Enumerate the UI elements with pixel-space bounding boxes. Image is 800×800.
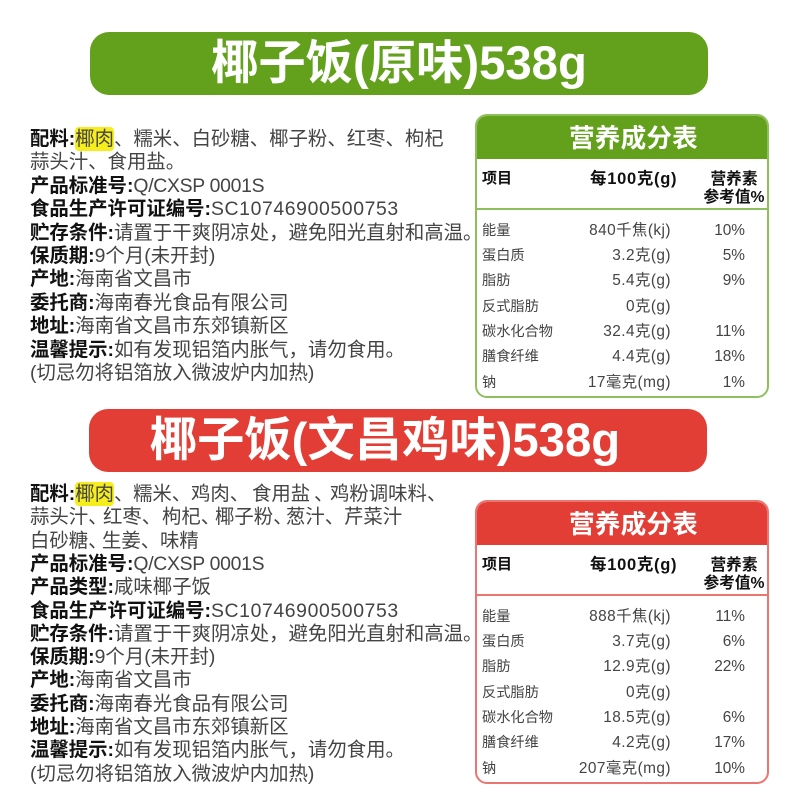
panel: original flavor nutrition table (475, 114, 769, 398)
row: sodium: 207毫克(mg) (579, 760, 671, 776)
text block: chicken flavor product information: 保质期:9个月(未开封) (30, 646, 215, 668)
text block: chicken flavor product information: 生姜、 (102, 530, 160, 552)
row: fat: 脂肪 (482, 659, 510, 675)
text block: chicken flavor product information: 食品生产许可证编号:SC10746900500753 (30, 600, 399, 622)
row: sodium: 钠 (482, 374, 496, 390)
text block: chicken flavor product information: 产品类型:咸味椰子饭 (30, 576, 211, 598)
row: energy: 能量 (482, 223, 510, 239)
row: protein: 蛋白质 (482, 634, 525, 650)
row: protein: 5% (723, 247, 745, 264)
row: protein (482, 246, 745, 264)
text block: chicken flavor product information: 红枣、 (103, 506, 161, 528)
row: trans fat: 0克(g) (626, 684, 671, 700)
row: trans fat: 反式脂肪 (482, 684, 539, 700)
table header: nutrient reference value: 参考值% (703, 189, 764, 206)
text block: original flavor product information: 地址:海南省文昌市东郊镇新区 (30, 315, 289, 337)
row: dietary fiber (482, 348, 745, 365)
row: carbohydrate: 6% (723, 708, 745, 726)
row: carbohydrate: 碳水化合物 (482, 710, 553, 726)
text block: chicken flavor product information: 味精 (160, 530, 199, 552)
row: dietary fiber: 18% (714, 348, 745, 365)
text block: original flavor product information (30, 127, 482, 384)
text block: chicken flavor product information: 地址:海南省文昌市东郊镇新区 (30, 716, 289, 738)
row: energy: 840千焦(kj) (589, 222, 671, 239)
row: energy (482, 222, 745, 239)
text block: chicken flavor product information: 椰子粉、 (215, 506, 293, 528)
title: original flavor: 椰子饭(原味)538g (211, 37, 587, 90)
row: carbohydrate: 32.4克(g) (603, 322, 671, 340)
panel heading: 营养成分表 (569, 125, 698, 153)
table header: item: 项目 (482, 170, 512, 187)
row: sodium: 10% (714, 760, 745, 776)
text block: chicken flavor product information: 鸡粉调味料、 (330, 483, 446, 505)
row: energy: 能量 (482, 609, 510, 625)
text block: chicken flavor product information: 枸杞、 (162, 506, 220, 528)
text block: chicken flavor product information: 配料:椰肉、 (30, 483, 133, 505)
row: carbohydrate: 11% (715, 322, 745, 340)
row: energy: 888千焦(kj) (589, 608, 671, 625)
title: original flavor (90, 32, 708, 95)
row: fat: 5.4克(g) (612, 272, 671, 289)
table header: per 100g: 每100克(g) (590, 556, 677, 574)
row: sodium (482, 374, 745, 390)
text block: original flavor product information: 产品标准号:Q/CXSP 0001S (30, 175, 264, 197)
row: trans fat (482, 684, 671, 700)
row: fat: 12.9克(g) (603, 658, 671, 675)
row: carbohydrate (482, 708, 745, 726)
row: trans fat (482, 298, 671, 314)
text block: original flavor product information: 产地:海南省文昌市 (30, 268, 192, 290)
row: dietary fiber: 4.4克(g) (612, 348, 671, 365)
panel: chicken flavor nutrition table (475, 500, 769, 784)
row: fat: 22% (714, 658, 745, 675)
text block: chicken flavor product information: 产品标准号:Q/CXSP 0001S (30, 553, 264, 575)
panel heading (475, 500, 769, 545)
row: dietary fiber: 17% (714, 734, 745, 751)
row: dietary fiber: 膳食纤维 (482, 349, 539, 365)
text block: original flavor product information: 保质期:9个月(未开封) (30, 245, 215, 267)
row: trans fat: 0克(g) (626, 298, 671, 314)
text block: original flavor product information: (切忌勿将铝箔放入微波炉内加热) (30, 362, 314, 384)
table header: nutrient reference value: 参考值% (703, 575, 764, 592)
row: trans fat: 反式脂肪 (482, 298, 539, 314)
text block: chicken flavor product information: 产地:海南省文昌市 (30, 669, 192, 691)
row: sodium: 1% (723, 374, 745, 390)
text block: original flavor product information: 蒜头汁、食用盐。 (30, 151, 185, 173)
text block: chicken flavor product information: 贮存条件:请置于干爽阴凉处，避免阳光直射和高温。 (30, 623, 482, 645)
text block: chicken flavor product information: 食用盐 (252, 483, 310, 505)
row: carbohydrate: 碳水化合物 (482, 324, 553, 340)
row: protein: 3.2克(g) (612, 247, 671, 264)
text block: original flavor product information: 配料:椰肉、糯米、白砂糖、椰子粉、红枣、枸杞 (30, 128, 444, 150)
text block: chicken flavor product information: 蒜头汁、 (30, 506, 108, 528)
text block: original flavor product information: 温馨提示:如有发现铝箔内胀气，请勿食用。 (30, 339, 405, 361)
row: protein: 蛋白质 (482, 248, 525, 264)
row: dietary fiber: 膳食纤维 (482, 735, 539, 751)
row: dietary fiber (482, 734, 745, 751)
text block: chicken flavor product information: 委托商:海南春光食品有限公司 (30, 693, 289, 715)
text block: chicken flavor product information: 葱汁、 (286, 506, 344, 528)
table header: nutrient reference value: 营养素 (710, 557, 758, 574)
row: fat (482, 658, 745, 675)
table header: per 100g: 每100克(g) (590, 170, 677, 188)
row: fat: 脂肪 (482, 273, 510, 289)
row: fat (482, 272, 745, 289)
text block: original flavor product information: 贮存条件:请置于干爽阴凉处，避免阳光直射和高温。 (30, 222, 482, 244)
panel heading: 营养成分表 (569, 511, 698, 539)
row: carbohydrate (482, 322, 745, 340)
row: energy: 10% (714, 222, 745, 239)
table header: item: 项目 (482, 556, 512, 573)
row: protein: 6% (723, 633, 745, 650)
text block: chicken flavor product information: (切忌勿将铝箔放入微波炉内加热) (30, 763, 314, 785)
text block: chicken flavor product information: 温馨提示:如有发现铝箔内胀气，请勿食用。 (30, 739, 405, 761)
row: protein: 3.7克(g) (612, 633, 671, 650)
text block: chicken flavor product information (30, 482, 482, 785)
text block: chicken flavor product information: 糯米、 (133, 483, 191, 505)
title: Wenchang chicken flavor (89, 409, 707, 472)
table header: nutrient reference value: 营养素 (710, 171, 758, 188)
text block: chicken flavor product information: 、 (314, 483, 333, 505)
row: sodium (482, 760, 745, 776)
text block: original flavor product information: 食品生产许可证编号:SC10746900500753 (30, 198, 399, 220)
text block: chicken flavor product information: 芹菜汁 (344, 506, 402, 528)
row: dietary fiber: 4.2克(g) (612, 734, 671, 751)
row: sodium: 17毫克(mg) (588, 374, 671, 390)
row: energy: 11% (715, 608, 745, 625)
row: protein (482, 632, 745, 650)
table header: nutrient reference value (703, 556, 764, 592)
row: fat: 9% (723, 272, 745, 289)
row: sodium: 钠 (482, 760, 496, 776)
panel heading (475, 114, 769, 159)
title: Wenchang chicken flavor: 椰子饭(文昌鸡味)538g (150, 414, 620, 467)
table header: nutrient reference value (703, 170, 764, 206)
text block: original flavor product information: 委托商:海南春光食品有限公司 (30, 292, 289, 314)
text block: chicken flavor product information: 鸡肉、 (191, 483, 249, 505)
text block: chicken flavor product information: 白砂糖、 (30, 530, 108, 552)
row: carbohydrate: 18.5克(g) (603, 708, 671, 726)
row: energy (482, 608, 745, 625)
